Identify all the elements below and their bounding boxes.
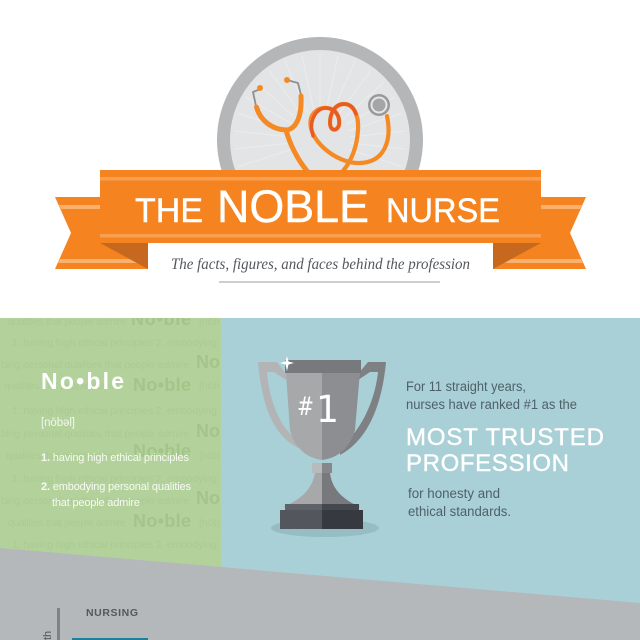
background word texture: No•ble xyxy=(131,309,191,329)
panel: gray diagonal section xyxy=(0,548,640,640)
background word texture: 1. having high ethical principles 2. embodying xyxy=(12,405,217,417)
title: NOBLE xyxy=(217,181,369,232)
background word texture: bing personal qualities that people admire xyxy=(1,359,189,371)
trophy sparkle xyxy=(280,356,294,371)
icon: trophy xyxy=(258,356,386,537)
text block: trust statistic outro: for honesty and xyxy=(408,486,500,501)
definition list: 2. embodying personal qualities xyxy=(41,481,192,493)
background word texture: 1. having high ethical principles 2. embodying xyxy=(12,337,217,349)
panel: noble definition xyxy=(0,309,221,578)
panel: header background xyxy=(0,0,640,318)
background word texture: No•ble xyxy=(133,511,191,531)
background word texture: [nōb xyxy=(199,450,220,462)
icon: stethoscope chest piece xyxy=(368,94,390,116)
trophy rank label: 1 xyxy=(316,388,339,431)
text block: trust statistic outro xyxy=(408,486,511,519)
chart axis xyxy=(57,608,60,640)
background word texture: No xyxy=(196,488,220,508)
left ribbon tail xyxy=(55,197,148,269)
background word texture: [nōb xyxy=(199,517,220,529)
background word texture: qualities that people admire xyxy=(8,316,126,328)
subtitle: The facts, figures, and faces behind the profession xyxy=(171,256,470,273)
background word texture: No xyxy=(196,352,220,372)
trophy shadow xyxy=(271,519,379,537)
definition heading: No•ble xyxy=(41,368,124,394)
chart bar xyxy=(72,638,148,640)
background word texture: [nōb xyxy=(199,380,220,392)
pronunciation: [nōbəl] xyxy=(41,417,75,429)
trophy rank label xyxy=(297,388,339,431)
icon: stethoscope headset xyxy=(253,77,307,171)
background word texture: No•ble xyxy=(133,375,191,395)
trophy rank label: # xyxy=(297,392,314,422)
icon: stethoscope medallion xyxy=(217,37,423,243)
background word texture: 1. having high ethical principles 2. embodying xyxy=(12,473,217,485)
trophy base xyxy=(285,504,322,510)
ribbon main band xyxy=(100,170,541,243)
trophy handles xyxy=(258,362,298,448)
icon: heart-shaped tube xyxy=(310,104,389,171)
heading: most trusted profession xyxy=(406,424,604,477)
chart: nursing bar chart fragment xyxy=(42,607,148,640)
right ribbon tail xyxy=(493,197,586,269)
subtitle rule xyxy=(219,281,440,283)
background word texture: qualities that people admire xyxy=(8,517,126,529)
chart series label: NURSING xyxy=(86,607,138,619)
text block: trust statistic outro: ethical standards. xyxy=(408,504,511,519)
background word texture: [nōb xyxy=(199,316,220,328)
panel: most trusted profession xyxy=(221,318,640,608)
ribbon banner xyxy=(55,170,586,275)
definition list: 1. having high ethical principles xyxy=(41,452,190,464)
chart axis label: th xyxy=(42,631,54,640)
trophy stem xyxy=(283,473,322,507)
definition list: that people admire xyxy=(52,497,140,509)
text block: trust statistic intro: nurses have ranked #1 as the xyxy=(406,397,577,412)
background word texture: No xyxy=(196,421,220,441)
background word texture: bing personal qualities that people admire xyxy=(1,428,189,440)
heading: most trusted profession: PROFESSION xyxy=(406,450,569,477)
text block: trust statistic intro: For 11 straight years, xyxy=(406,379,526,394)
text block: trust statistic intro xyxy=(406,379,577,412)
heading: most trusted profession: MOST TRUSTED xyxy=(406,424,604,451)
background word texture: qualities that people admire xyxy=(6,450,124,462)
definition list xyxy=(41,452,192,509)
background word texture: No•ble xyxy=(133,441,191,461)
title xyxy=(135,181,500,232)
trophy cup xyxy=(285,360,322,460)
title: THE xyxy=(135,192,203,230)
background word texture xyxy=(1,309,220,551)
background word texture: 1. having high ethical principles 2. embodying xyxy=(12,539,217,551)
white strip behind subtitle xyxy=(148,243,493,275)
title: NURSE xyxy=(386,192,500,230)
background word texture: qualities that people admire xyxy=(4,380,122,392)
background word texture: bing personal qualities that people admire xyxy=(1,495,189,507)
ribbon folds xyxy=(100,243,148,269)
